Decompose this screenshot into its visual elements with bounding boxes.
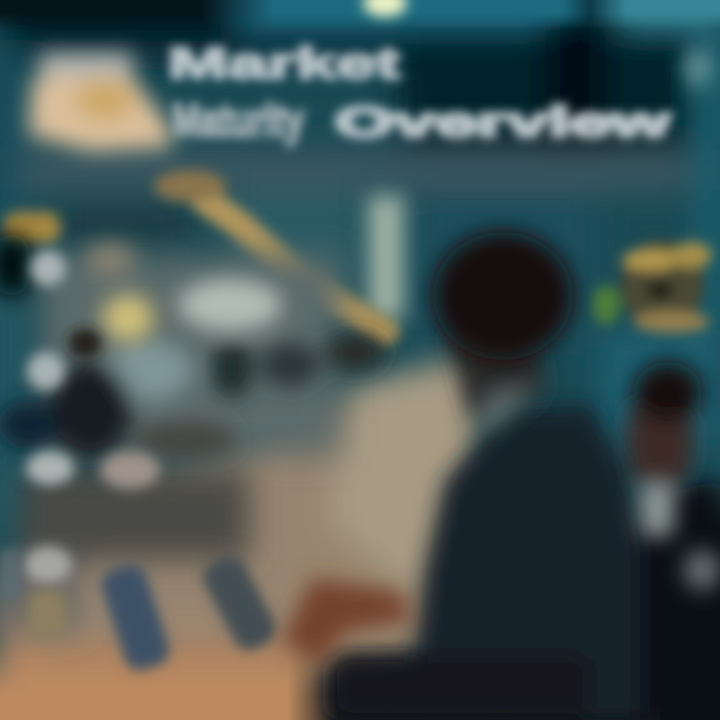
gold trend arrow — [154, 170, 385, 332]
arm and hand — [282, 578, 412, 664]
row markers — [24, 250, 160, 584]
right edge shadow — [704, 488, 720, 712]
dark dot — [69, 329, 101, 357]
hair — [433, 232, 573, 360]
grey device — [198, 550, 281, 656]
ceiling light — [363, 0, 407, 17]
title: Maturity — [172, 94, 304, 146]
light column — [368, 195, 404, 320]
gold dot — [102, 294, 154, 342]
title: Market — [168, 39, 401, 88]
bright window spot — [686, 48, 710, 88]
second person — [626, 362, 720, 720]
gold label — [4, 212, 60, 244]
businessman foreground — [282, 232, 720, 720]
title — [168, 39, 671, 146]
floor — [0, 350, 480, 720]
suit — [330, 405, 720, 720]
neck and face — [445, 330, 545, 430]
title: Overview — [335, 98, 671, 145]
table edge — [0, 644, 660, 720]
devices on table — [0, 550, 281, 674]
dashboard chart cluster — [0, 233, 385, 630]
blue device — [97, 560, 174, 674]
right icon badge — [592, 241, 712, 333]
shirt detail — [684, 550, 720, 590]
title icon block — [28, 52, 172, 152]
tan device — [28, 590, 66, 638]
